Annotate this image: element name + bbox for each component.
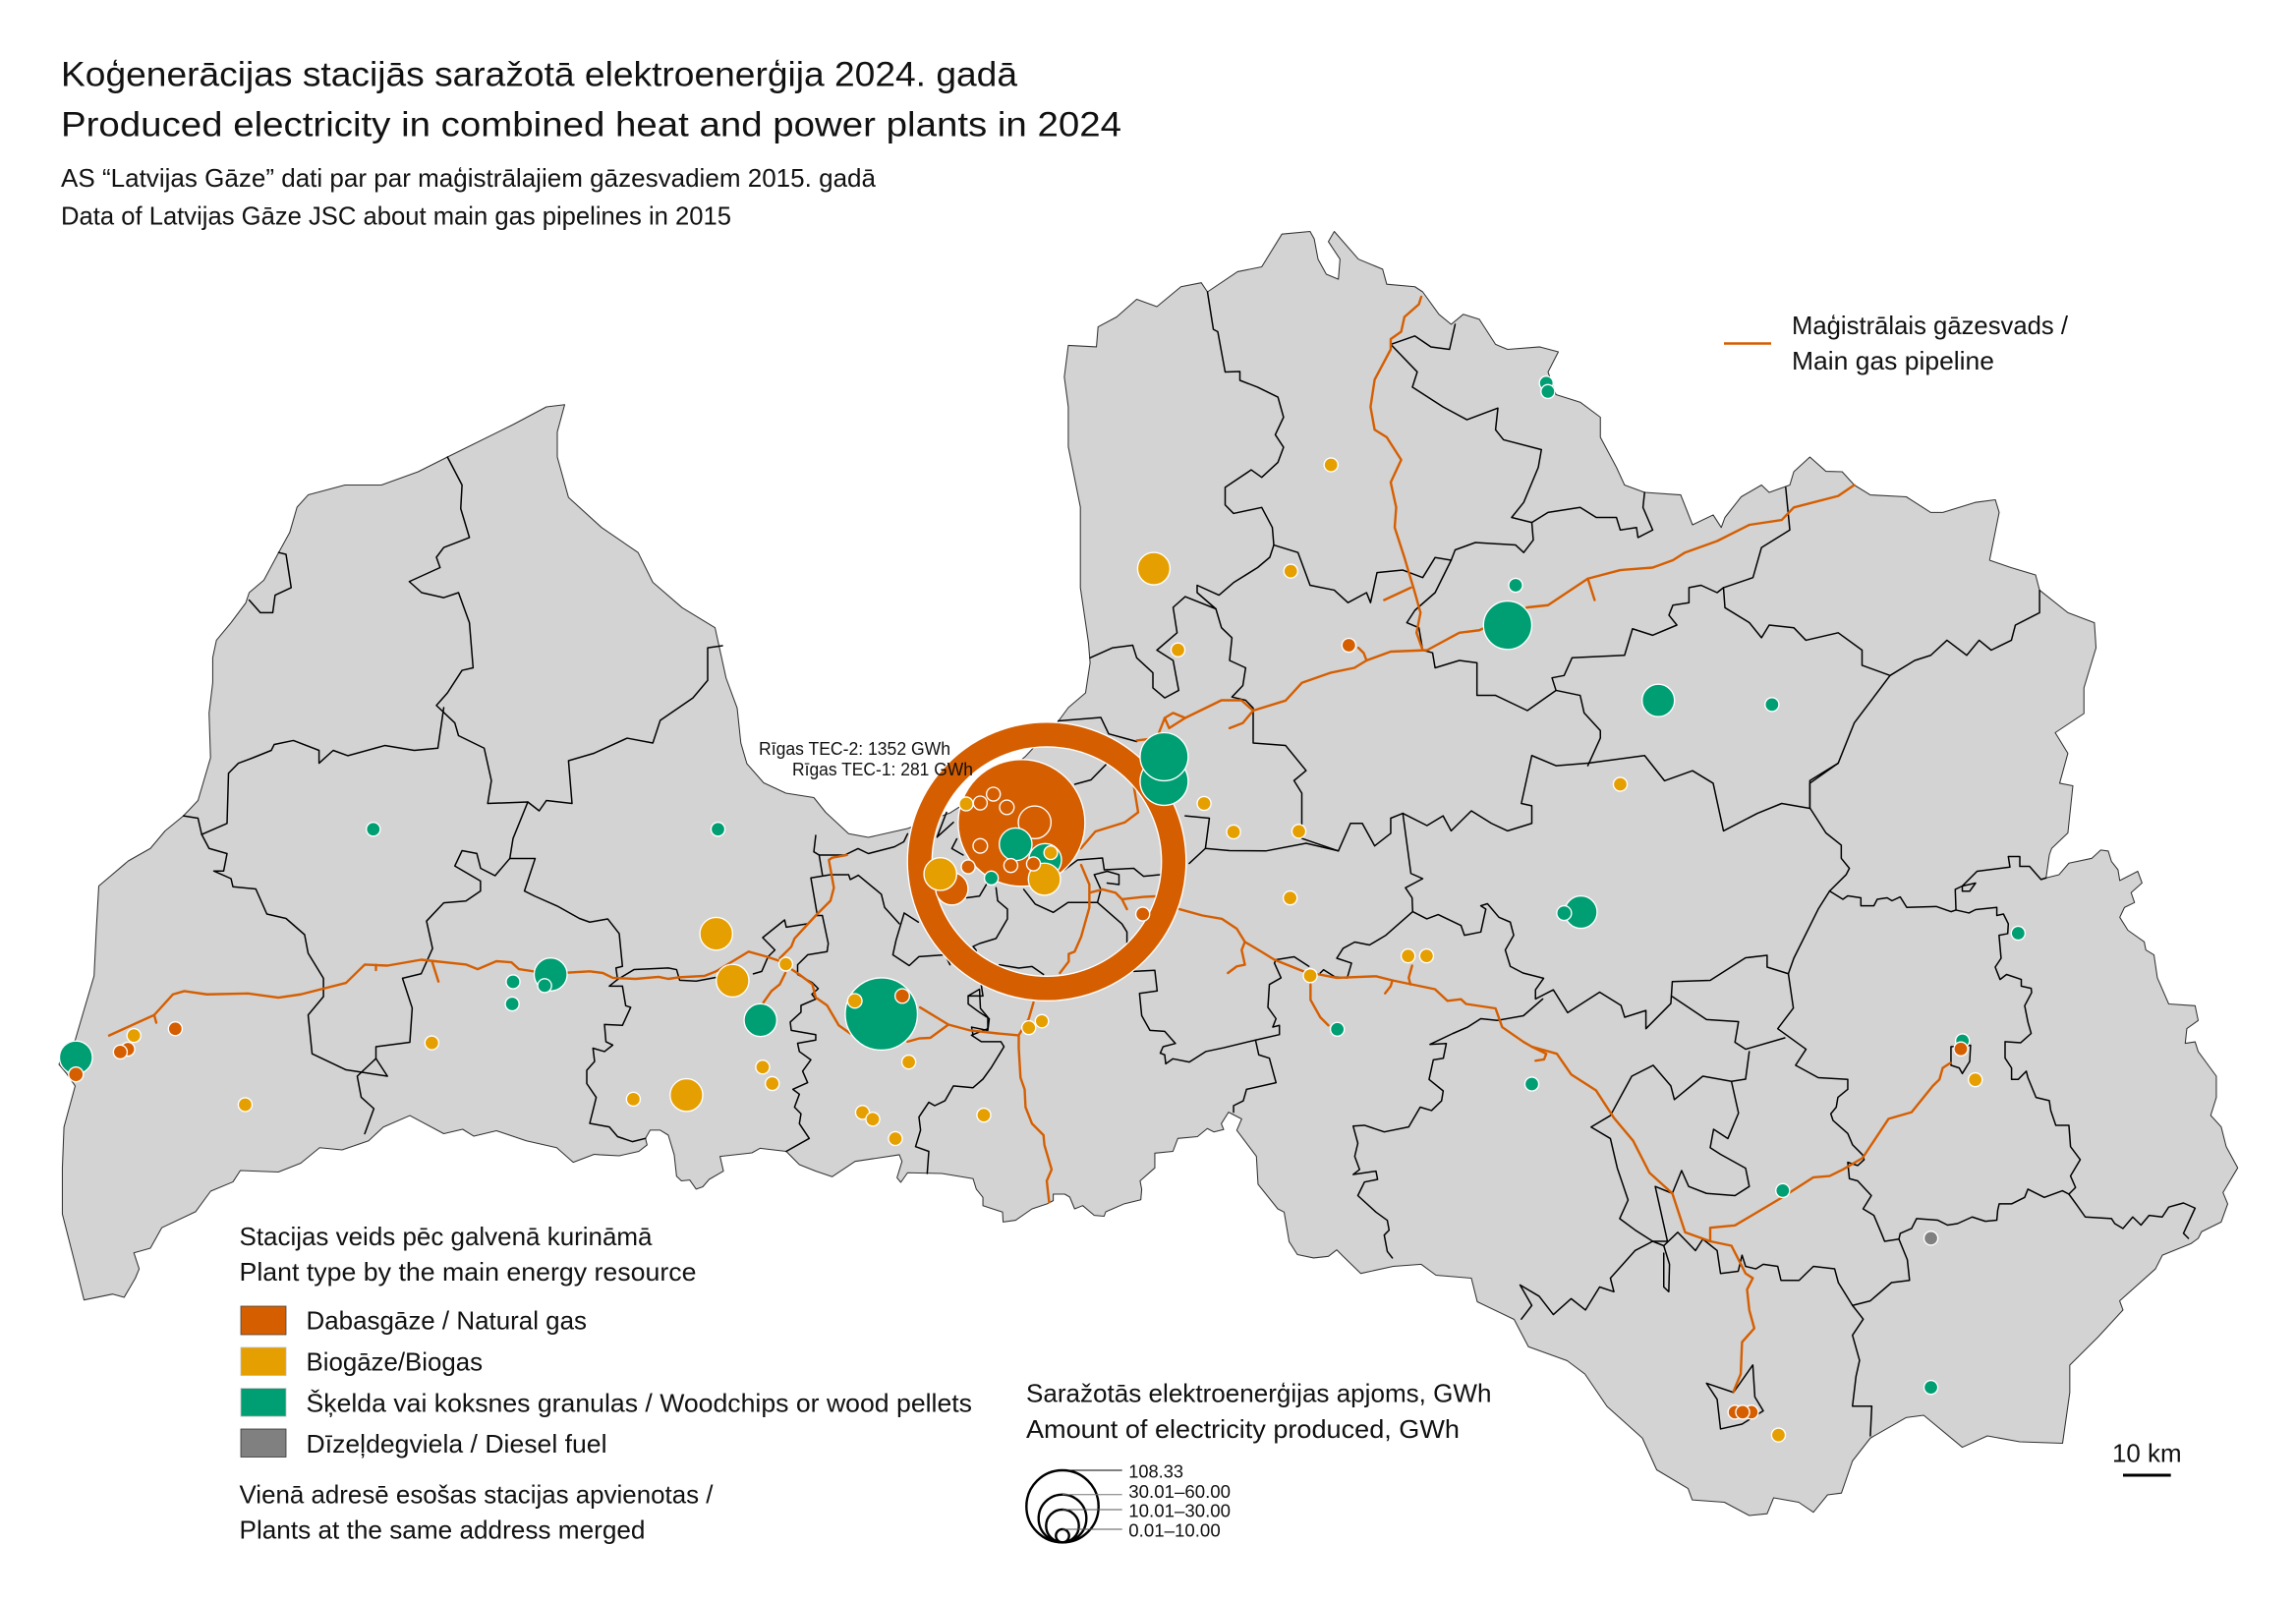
northern plants (1137, 376, 2025, 941)
Rīgas TEC-2 ring (907, 722, 1186, 1001)
legend: plant type (240, 1222, 972, 1459)
administrative borders (184, 292, 2195, 1436)
circle size labels: 30.01–60.00 (1128, 1482, 1231, 1502)
land outline (59, 232, 2238, 1516)
legend: plant type: Plant type by the main energy resource (240, 1257, 696, 1287)
western plants (59, 823, 991, 1146)
circle size labels (1128, 1461, 1231, 1540)
biogas: Biogāze/Biogas (307, 1346, 483, 1376)
natural gas: Dabasgāze / Natural gas (307, 1305, 587, 1335)
Rīgas TEC-1 circle (958, 760, 1085, 887)
legend: amount of electricity (1026, 1379, 1492, 1542)
diesel: Dīzeļdegviela / Diesel fuel (307, 1429, 607, 1459)
note: merged plants (240, 1480, 714, 1545)
map of Latvia (59, 232, 2238, 1516)
legend: amount of electricity: Amount of electricity produced, GWh (1026, 1414, 1460, 1444)
subtitle: data source: Data of Latvijas Gāze JSC about main gas pipelines in 2015 (61, 200, 731, 230)
subtitle: data source (61, 163, 877, 230)
note: merged plants: Vienā adresē esošas stacijas apvienotas / (240, 1480, 714, 1510)
title: Produced electricity in combined heat and power plants in 2024 (61, 104, 1121, 143)
scale bar: 10 km (2112, 1439, 2182, 1468)
Riga TEC labels (759, 739, 973, 779)
eastern plants near Riga (1022, 733, 1433, 1036)
legend: main gas pipeline: Main gas pipeline (1792, 346, 1994, 375)
title: Koģenerācijas stacijās saražotā elektroenerģija 2024. gadā (61, 55, 1017, 94)
title (61, 55, 1121, 143)
legend: amount of electricity: Saražotās elektroenerģijas apjoms, GWh (1026, 1379, 1492, 1408)
south-eastern plants (1524, 1034, 1982, 1442)
note: merged plants: Plants at the same address merged (240, 1516, 645, 1545)
Riga TEC labels: Rīgas TEC-2: 1352 GWh (759, 739, 950, 759)
circle size labels: 0.01–10.00 (1128, 1520, 1221, 1540)
legend: main gas pipeline: Maģistrālais gāzesvads / (1792, 311, 2069, 340)
legend: main gas pipeline (1724, 311, 2069, 375)
proportional circles (1026, 1470, 1122, 1542)
plant circles (59, 376, 2025, 1442)
circle size labels: 10.01–30.00 (1128, 1501, 1231, 1520)
Riga city plants (924, 787, 1150, 921)
legend: plant type: Stacijas veids pēc galvenā kurināmā (240, 1222, 653, 1251)
Riga TEC labels: Rīgas TEC-1: 281 GWh (792, 760, 973, 779)
woodchips: Šķelda vai koksnes granulas / Woodchips or wood pellets (307, 1388, 972, 1417)
circle size labels: 108.33 (1128, 1461, 1183, 1481)
gas pipelines (109, 297, 1950, 1392)
subtitle: data source: AS “Latvijas Gāze” dati par par maģistrālajiem gāzesvadiem 2015. gadā (61, 163, 877, 193)
